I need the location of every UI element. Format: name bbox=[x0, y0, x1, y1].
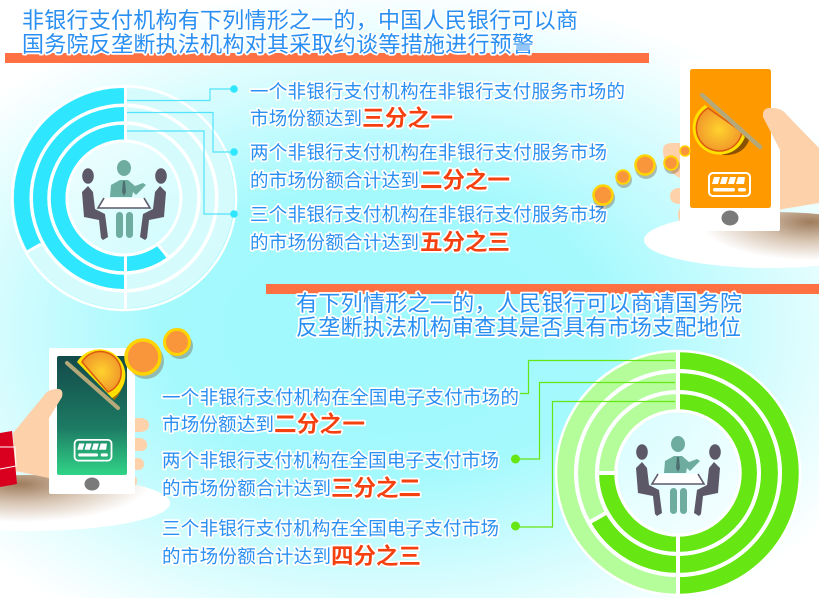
text block: first group criteria: 一个非银行支付机构在非银行支付服务市场的 bbox=[250, 81, 625, 102]
text block: first group criteria: 市场份额达到 bbox=[250, 108, 362, 129]
icon: meeting people (cyan chart) bbox=[82, 160, 167, 240]
coin and slot bbox=[67, 349, 125, 408]
orange bar: second heading bbox=[266, 284, 819, 294]
connector lines: cyan bbox=[127, 85, 238, 218]
title: second heading: 反垄断执法机构审查其是否具有市场支配地位 bbox=[296, 315, 741, 340]
red cuff bbox=[0, 431, 17, 487]
orange bar: top heading bbox=[5, 53, 649, 63]
home button bbox=[722, 210, 738, 226]
home button bbox=[84, 478, 100, 490]
title: second heading: 有下列情形之一的，人民银行可以商请国务院 bbox=[296, 291, 742, 316]
title: top heading: 国务院反垄断执法机构对其采取约谈等措施进行预警 bbox=[22, 32, 534, 57]
text block: second group criteria: 两个非银行支付机构在全国电子支付市场 bbox=[162, 450, 499, 471]
thumb and palm bbox=[763, 108, 819, 210]
fingers bbox=[130, 418, 149, 485]
donut chart: green rings bbox=[556, 351, 800, 595]
text block: second group criteria: 三个非银行支付机构在全国电子支付市场 bbox=[162, 518, 499, 539]
text block: first group criteria: 三分之一 bbox=[362, 105, 453, 131]
text block: second group criteria: 三分之二 bbox=[331, 475, 421, 501]
text block: second group criteria: 的市场份额合计达到 bbox=[162, 478, 331, 499]
illustration: hand holding orange phone bbox=[593, 60, 819, 268]
keyboard icon bbox=[709, 173, 750, 196]
phone body bbox=[680, 60, 780, 231]
text block: first group criteria: 二分之一 bbox=[420, 167, 510, 193]
text block: second group criteria: 市场份额达到 bbox=[162, 414, 274, 435]
palm bbox=[13, 389, 62, 478]
icon: meeting people (green chart) bbox=[636, 436, 721, 516]
title: top heading bbox=[22, 8, 578, 57]
donut chart: cyan rings bbox=[12, 86, 236, 310]
text block: first group criteria bbox=[250, 81, 625, 255]
phone screen bbox=[57, 356, 127, 475]
text block: second group criteria: 二分之一 bbox=[274, 411, 365, 437]
shadow ellipse bbox=[644, 212, 819, 268]
coin and slot bbox=[693, 95, 760, 155]
text block: first group criteria: 两个非银行支付机构在非银行支付服务市场 bbox=[250, 142, 607, 163]
flying coins bbox=[126, 330, 193, 379]
phone body bbox=[49, 348, 135, 494]
fingers bbox=[663, 143, 690, 222]
title: second heading bbox=[296, 291, 742, 340]
text block: second group criteria: 四分之三 bbox=[331, 543, 421, 569]
flying coins bbox=[593, 146, 690, 209]
text block: first group criteria: 的市场份额合计达到 bbox=[250, 170, 419, 191]
keyboard icon bbox=[75, 440, 112, 461]
text block: first group criteria: 三个非银行支付机构在非银行支付服务市场 bbox=[250, 204, 607, 225]
title: top heading: 非银行支付机构有下列情形之一的，中国人民银行可以商 bbox=[22, 8, 578, 33]
connector lines: green bbox=[511, 360, 675, 530]
text block: first group criteria: 五分之三 bbox=[420, 229, 510, 255]
text block: second group criteria bbox=[162, 387, 519, 569]
illustration: hand holding green phone bbox=[0, 330, 193, 531]
text block: second group criteria: 一个非银行支付机构在全国电子支付市场的 bbox=[162, 387, 519, 408]
phone screen bbox=[690, 69, 771, 208]
text block: second group criteria: 的市场份额合计达到 bbox=[162, 546, 331, 567]
text block: first group criteria: 的市场份额合计达到 bbox=[250, 232, 419, 253]
shadow ellipse bbox=[0, 475, 170, 531]
thumb overlap bbox=[40, 389, 62, 420]
